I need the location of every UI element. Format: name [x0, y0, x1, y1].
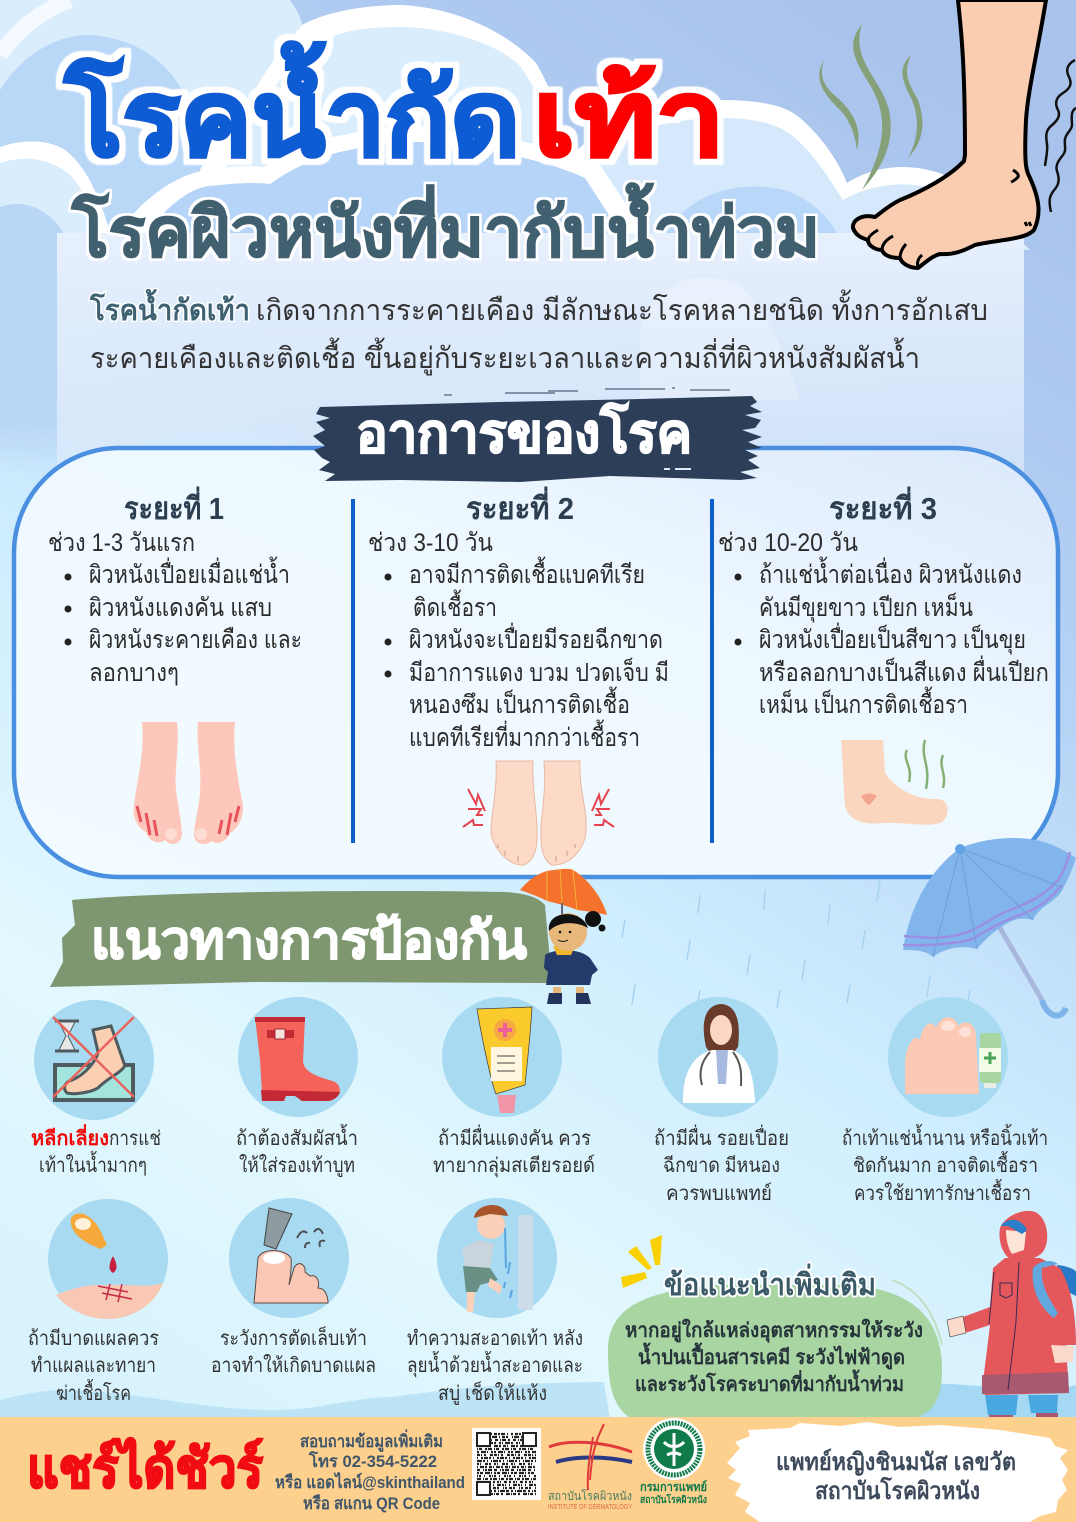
tip: wash feet: สบู่ เช็ดให้แห้ง — [438, 1380, 547, 1406]
intro paragraph: โรคน้ำกัดเท้า — [89, 288, 250, 327]
icon: blue umbrella — [903, 838, 1076, 1016]
stage 1: ช่วง 1-3 วันแรก — [48, 529, 195, 557]
panel: symptoms — [14, 388, 1058, 877]
intro paragraph: เกิดจากการระคายเคือง มีลักษณะโรคหลายชนิด ทั้งการอักเสบ — [256, 289, 988, 327]
banner: prevention: แนวทางการป้องกัน — [91, 912, 527, 970]
heading banner: symptoms: อาการของโรค — [356, 402, 692, 464]
stage 1 — [48, 486, 302, 687]
tip: antifungal for toes: ควรใช้ยาทารักษาเชื้อรา — [854, 1179, 1031, 1205]
stage 3: คันมีขุยขาว เปียก เหม็น — [759, 592, 973, 623]
stage 3: ระยะที่ 3 — [829, 486, 937, 526]
slogan: แชร์ได้ชัวร์ — [27, 1437, 263, 1499]
callout: additional advice: และระวังโรคระบาดที่มากับน้ำท่วม — [635, 1369, 904, 1396]
callout: additional advice: หากอยู่ใกล้แหล่งอุตสาหกรรมให้ระวัง — [625, 1318, 923, 1344]
tip: careful nail clipping — [211, 1198, 376, 1377]
stage 1: ผิวหนังแดงคัน แสบ — [89, 594, 272, 622]
tip: wear boots: ให้ใส่รองเท้าบูท — [239, 1154, 355, 1178]
stage 1: ลอกบางๆ — [89, 659, 179, 687]
intro paragraph: ระคายเคืองและติดเชื้อ ขึ้นอยู่กับระยะเวลาและความถี่ที่ผิวหนังสัมผัสน้ำ — [90, 337, 920, 376]
heading: main title — [64, 41, 725, 178]
tip: steroid cream — [433, 997, 595, 1178]
tip: see a doctor — [654, 997, 789, 1205]
icon: feet with red toes — [134, 722, 243, 844]
tip: see a doctor: ฉีกขาด มีหนอง — [663, 1155, 780, 1177]
stage 3: ถ้าแช่น้ำต่อเนื่อง ผิวหนังแดง — [759, 556, 1022, 589]
tip: treat wounds — [28, 1199, 168, 1405]
stage 2: มีอาการแดง บวม ปวดเจ็บ มี — [409, 657, 669, 687]
stage 1: ผิวหนังระคายเคือง และ — [89, 626, 302, 654]
stage 2: อาจมีการติดเชื้อแบคทีเรีย — [409, 556, 645, 589]
wavy lines — [1045, 60, 1076, 212]
stage 2: ติดเชื้อรา — [413, 589, 497, 622]
stage 2: ช่วง 3-10 วัน — [368, 529, 493, 557]
tip: see a doctor: ถ้ามีผื่น รอยเปื่อย — [654, 1124, 789, 1150]
tip: avoid soaking — [31, 1000, 161, 1177]
tip: careful nail clipping: ระวังการตัดเล็บเท้า — [220, 1325, 367, 1350]
heading: main title: เท้า — [533, 61, 725, 178]
stage 3: เหม็น เป็นการติดเชื้อรา — [759, 686, 968, 719]
icon: person in red raincoat — [947, 1211, 1076, 1418]
stage 2: ระยะที่ 2 — [466, 486, 574, 526]
tip: wash feet: ลุยน้ำด้วยน้ำสะอาดและ — [407, 1351, 583, 1378]
stage 3: ช่วง 10-20 วัน — [718, 529, 858, 557]
tip: antifungal for toes: ชิดกันมาก อาจติดเชื้อรา — [853, 1151, 1038, 1177]
tip: steroid cream: ถ้ามีผื่นแดงคัน ควร — [438, 1124, 591, 1150]
contact details: สอบถามข้อมูลเพิ่มเติม — [300, 1429, 443, 1453]
tip: avoid soaking: หลีกเลี่ยง — [31, 1123, 109, 1150]
heading: main title: โรคน้ำกัด — [64, 41, 520, 178]
tip: avoid soaking: เท้าในน้ำมากๆ — [39, 1151, 147, 1177]
logo: institute of dermatology: INSTITUTE OF DERMATOLOGY — [548, 1504, 632, 1511]
tip: see a doctor: ควรพบแพทย์ — [666, 1182, 772, 1205]
logo: ministry of public health — [640, 1418, 707, 1506]
contact details: โทร 02-354-5222 — [308, 1451, 437, 1471]
stage 2: ผิวหนังจะเปื่อยมีรอยฉีกขาด — [409, 622, 663, 654]
credit: author on white brush: สถาบันโรคผิวหนัง — [815, 1476, 980, 1505]
rain streaks — [622, 880, 970, 1008]
logo: ministry of public health: สถาบันโรคผิวหนัง — [640, 1493, 707, 1506]
credit: author on white brush — [727, 1422, 1068, 1522]
credit: author on white brush: แพทย์หญิงชินมนัส เลขวัต — [776, 1448, 1016, 1476]
stage 1: ผิวหนังเปื่อยเมื่อแช่น้ำ — [89, 556, 290, 589]
stage 3 — [718, 486, 1049, 719]
tip: careful nail clipping: อาจทำให้เกิดบาดแผล — [211, 1354, 376, 1377]
tip: wash feet: ทำความสะอาดเท้า หลัง — [407, 1328, 583, 1350]
intro paragraph — [89, 288, 988, 376]
heading banner: symptoms — [313, 388, 762, 482]
logo: institute of dermatology: สถาบันโรคผิวหนัง — [548, 1489, 632, 1503]
footer — [0, 1417, 1076, 1522]
column dividers — [351, 499, 714, 843]
stage 2: แบคทีเรียที่มากกว่าเชื้อรา — [409, 719, 640, 752]
illustration: foot with odour — [819, 0, 1076, 268]
callout: additional advice — [608, 1235, 942, 1418]
prevention row 2 — [28, 1198, 583, 1406]
tip: treat wounds: ถ้ามีบาดแผลควร — [28, 1328, 159, 1350]
tip: antifungal for toes — [842, 997, 1048, 1205]
contact details — [275, 1429, 465, 1513]
tip: wear boots — [236, 997, 358, 1178]
logo: institute of dermatology — [548, 1424, 632, 1511]
tip: treat wounds: ฆ่าเชื้อโรค — [56, 1379, 131, 1405]
tip: steroid cream: ทายากลุ่มสเตียรอยด์ — [433, 1154, 595, 1178]
contact details: หรือ แอดไลน์@skinthailand — [275, 1472, 465, 1492]
tip: wear boots: ถ้าต้องสัมผัสน้ำ — [236, 1124, 358, 1150]
callout: additional advice: ข้อแนะนำเพิ่มเติม — [664, 1263, 876, 1302]
QR code — [472, 1428, 541, 1500]
stage 1: ระยะที่ 1 — [124, 486, 224, 526]
banner: prevention — [50, 891, 552, 987]
tip: avoid soaking: การแช่ — [109, 1128, 161, 1150]
stage 2: หนองซึม เป็นการติดเชื้อ — [409, 686, 630, 719]
tip: treat wounds: ทำแผลและทายา — [31, 1355, 156, 1377]
callout: additional advice: น้ำปนเปื้อนสารเคมี ระวังไฟฟ้าดูด — [638, 1342, 905, 1371]
tip: wash feet — [407, 1198, 583, 1406]
stage 3: หรือลอกบางเป็นสีแดง ผื่นเปียก — [759, 655, 1049, 687]
odour wisps — [819, 24, 922, 190]
prevention row 1 — [31, 997, 1048, 1205]
contact details: หรือ สแกน QR Code — [303, 1493, 440, 1513]
icon: girl with orange umbrella — [520, 869, 607, 1004]
logo: ministry of public health: กรมการแพทย์ — [640, 1480, 707, 1494]
heading: subtitle: โรคผิวหนังที่มากับน้ำท่วม — [71, 182, 820, 271]
icon: foot with odour — [841, 740, 948, 825]
stage 3: ผิวหนังเปื่อยเป็นสีขาว เป็นขุย — [759, 622, 1026, 655]
stage 2 — [368, 486, 669, 752]
icon: swollen feet with pain marks — [463, 761, 614, 865]
